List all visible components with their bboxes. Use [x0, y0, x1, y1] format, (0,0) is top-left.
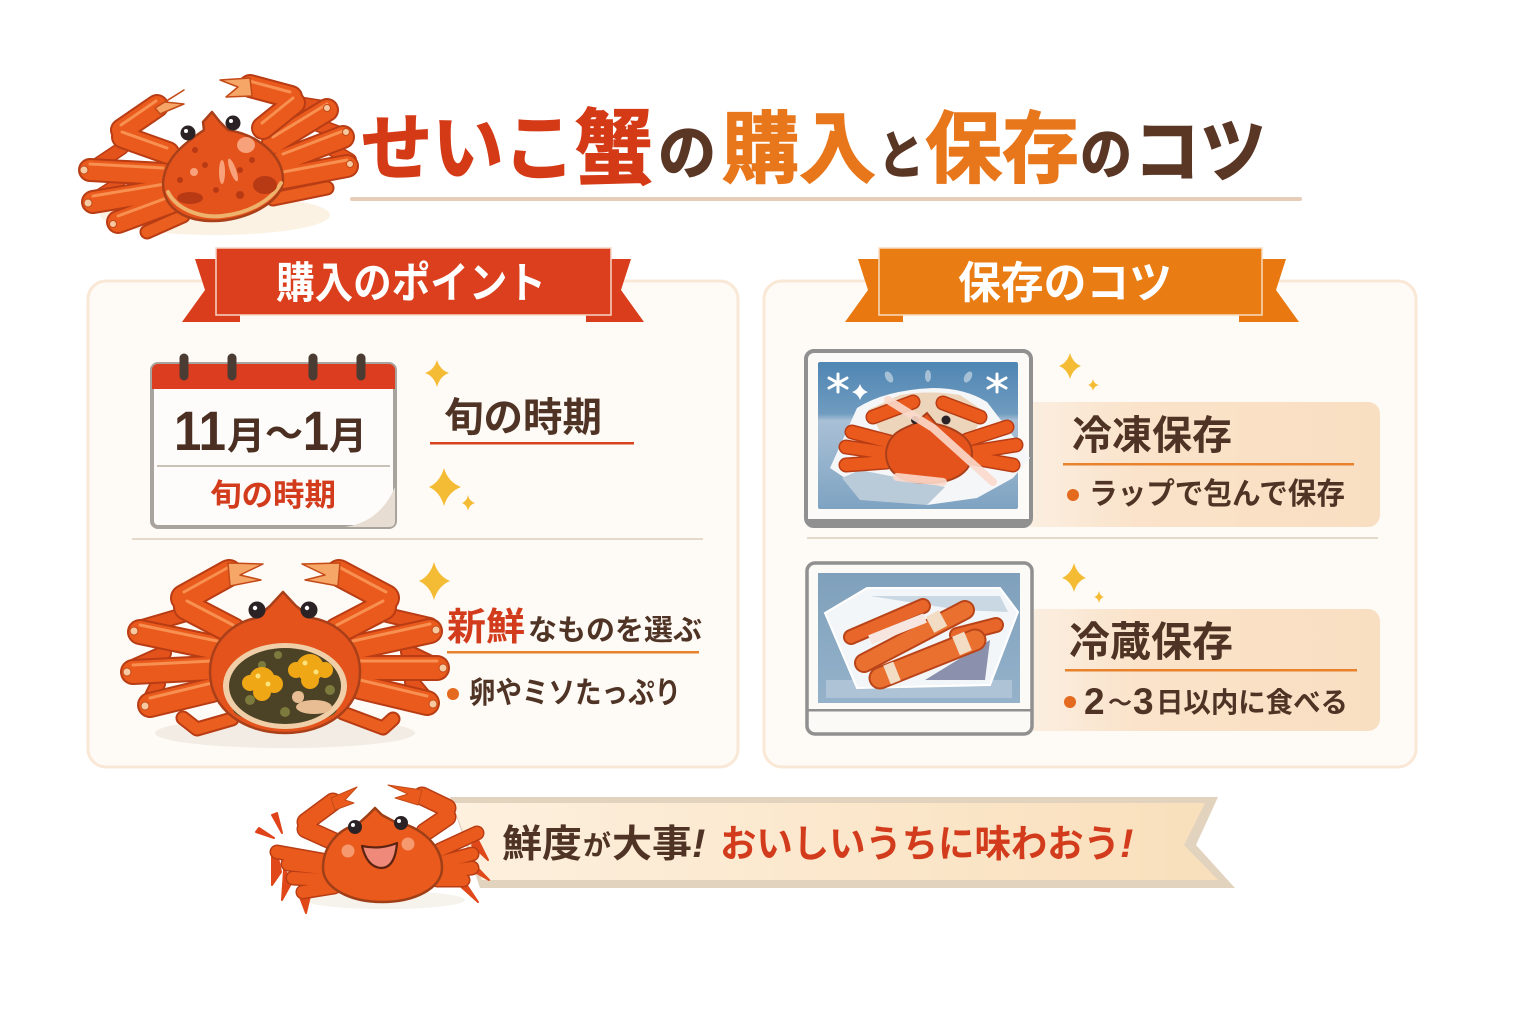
fridge label: 冷蔵保存 [1069, 619, 1233, 665]
title: と [878, 128, 924, 186]
closing banner: おいしいうちに味わおう [720, 824, 1120, 866]
closing banner [450, 797, 1235, 888]
fridge label: 2 [1084, 681, 1105, 722]
calendar icon: 11 [174, 399, 226, 462]
freshness text: 新鮮 [447, 607, 525, 649]
ribbon: purchase heading [182, 248, 644, 322]
fridge label: 〜 [1108, 683, 1132, 718]
calendar icon: 1 [303, 399, 329, 462]
closing banner: が [583, 830, 611, 861]
ribbon: purchase heading: 購入のポイント [276, 260, 546, 308]
freezer label: 冷凍保存 [1072, 414, 1232, 458]
sparkle: fresh [419, 562, 450, 600]
fridge label: 3 [1133, 681, 1154, 722]
closing banner: ! [692, 822, 705, 866]
icon: smiling crab [256, 785, 489, 913]
calendar icon: 〜 [265, 403, 303, 458]
freshness text [447, 607, 702, 710]
closing banner: 大事 [612, 824, 692, 866]
closing banner: ! [1120, 822, 1133, 866]
calendar icon [152, 358, 395, 527]
freshness text: 卵やミソたっぷり [469, 677, 681, 710]
title: 蟹 [575, 104, 653, 195]
title: せいこ [361, 107, 575, 190]
fridge label [1033, 609, 1380, 731]
calendar icon: 旬の時期 [210, 478, 336, 513]
title: 保存 [925, 105, 1079, 193]
panel: storage tips [764, 248, 1416, 767]
freezer illustration [806, 351, 1031, 526]
season label: 旬の時期 [444, 396, 602, 440]
title [361, 104, 1266, 195]
fridge illustration [807, 563, 1032, 734]
icon: open crab with roe [123, 563, 447, 748]
calendar icon: 月 [329, 416, 367, 458]
closing banner: 鮮度 [502, 824, 582, 866]
ribbon: storage heading [845, 248, 1299, 322]
title: 購入 [722, 105, 876, 193]
title: の [658, 120, 716, 187]
sparkles: freezer [1059, 353, 1099, 391]
title: コツ [1134, 113, 1266, 191]
fridge label: 日以内に食べる [1156, 687, 1348, 718]
icon: title crab [80, 78, 354, 235]
freezer label: ラップで包んで保存 [1089, 478, 1345, 511]
panel: purchase points [88, 248, 738, 767]
freshness text: なものを選ぶ [528, 614, 702, 647]
title: の [1080, 123, 1132, 186]
ribbon: storage heading: 保存のコツ [958, 259, 1172, 308]
calendar icon: 月 [227, 416, 265, 458]
freezer label [1030, 402, 1380, 527]
sparkles: season [425, 360, 475, 511]
sparkles: fridge [1062, 563, 1104, 603]
